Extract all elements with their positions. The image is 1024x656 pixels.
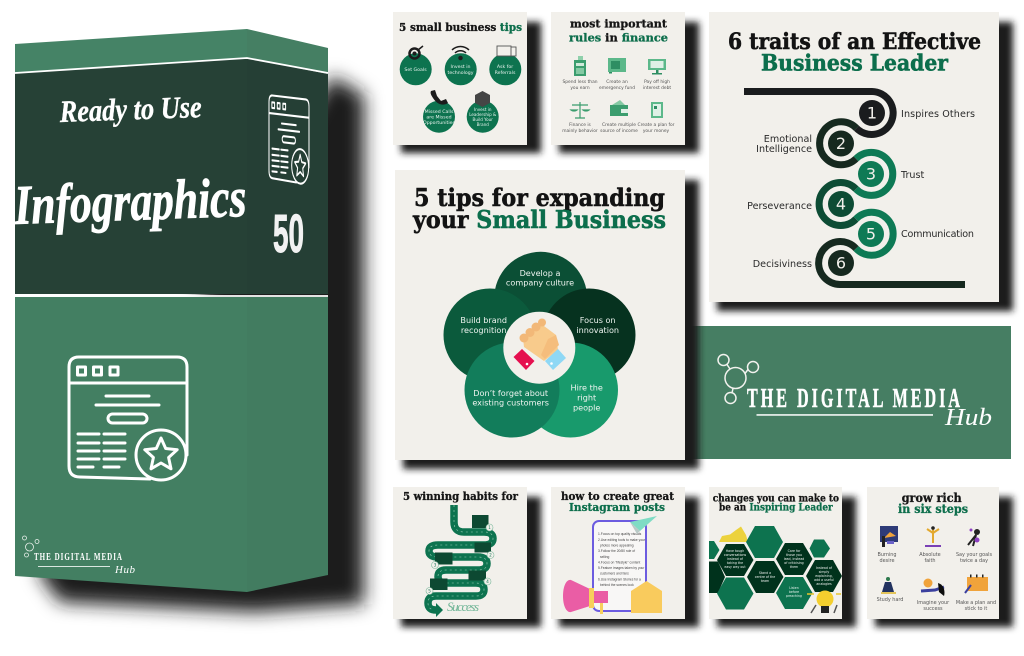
tip line 6: 4.Focus on "lifestyle" content [598, 560, 640, 564]
banner logo mark [718, 354, 758, 404]
caption: behavior: Finance is [569, 123, 591, 128]
icon: target [410, 46, 423, 58]
step 1 [859, 100, 885, 126]
tip: leadership: Leadership & [469, 112, 497, 117]
logo script: Hub [114, 564, 136, 576]
card background [393, 487, 527, 619]
tip: technology: technology [447, 70, 474, 76]
heading line 2: be an Inspiring Leader [719, 503, 833, 514]
box top band side [247, 29, 328, 74]
petal text: brand recognition: Build brand [460, 315, 507, 325]
tip: leadership: Build Your [473, 117, 493, 122]
hexagon text: care for those: of criticising [784, 561, 804, 565]
tip: set goals: Set Goals [404, 67, 427, 73]
step 5 [858, 221, 884, 247]
icon: wifi [452, 46, 469, 60]
hexagon text: useful analogies: Instead of [816, 566, 832, 570]
box logo [22, 536, 136, 576]
card background [393, 12, 527, 145]
heading line 2: rules in finance [569, 31, 668, 45]
card background [551, 487, 685, 619]
tip: referrals: Referrals [495, 70, 516, 76]
box dark panel side [247, 58, 328, 294]
icon: study hard [881, 577, 896, 594]
caption: interest debt: Pay off high [644, 80, 670, 85]
number 5: 5 [428, 588, 431, 594]
trait: Emotional Intelligence: Intelligence [756, 144, 812, 155]
hexagon text: useful analogies: add a useful [814, 578, 834, 582]
step 2: 2 [836, 134, 846, 153]
hexagon text: centre of team: team [761, 579, 769, 583]
phone frame [593, 521, 646, 611]
heading line 1: 5 tips for expanding [414, 183, 665, 212]
habit numbers [426, 524, 494, 594]
icon: imagine success [921, 578, 944, 596]
card background [395, 170, 685, 460]
heading: most important [570, 17, 668, 31]
icon: monitor [648, 59, 666, 74]
icon: chat bubbles [497, 46, 516, 56]
tip line 2: 2.Use editing tools to make your [598, 538, 646, 542]
card background [709, 12, 999, 302]
panel: 6 traits of an effective business leader [709, 12, 999, 302]
panel: 5 tips for expanding your small business [395, 170, 685, 460]
hexagon text: care for those: those you [786, 553, 802, 557]
petal text: right people: right [577, 393, 596, 403]
hexagon text: care for those: Care for [788, 549, 800, 553]
caption: imagine success: success [923, 606, 943, 612]
box dark panel front [15, 58, 247, 294]
trait: Inspires Others: Inspires Others [901, 109, 975, 120]
caption: say your goals: Say your goals [956, 552, 992, 558]
hexagon text: tough conversations: taking the [727, 561, 743, 565]
panel: 5 winning habits [393, 487, 527, 619]
box text: 50: 50 [273, 204, 304, 264]
logo wordmark: THE DIGITAL MEDIA [34, 552, 123, 563]
heading: 5 winning habits for [403, 490, 518, 503]
icon: lightbulb [807, 590, 841, 613]
logo mark [22, 536, 39, 557]
venn petals [444, 252, 636, 438]
tip: missed calls: Missed Calls [425, 110, 453, 115]
step 6: 6 [836, 254, 846, 272]
hexagon text: tough conversations: instead of [727, 557, 744, 561]
tip line 4: 3.Follow the 20/80 rule of [598, 549, 635, 553]
caption: behavior: mainly behavior [562, 128, 598, 134]
caption: plan: Create a plan for [638, 123, 674, 128]
hexagon text: listen before preaching: Listen [789, 586, 799, 590]
tip: missed calls: Opportunities [423, 120, 456, 126]
trait: Trust: Trust [900, 170, 924, 181]
icon: say your goals [968, 528, 980, 546]
caption: study hard: Study hard [877, 597, 903, 603]
icon: handshake fist [514, 318, 566, 370]
heading line 1: how to create great [561, 490, 675, 503]
number 2: 2 [489, 552, 492, 558]
trait: Decisiviness: Decisiviness [753, 259, 812, 270]
serpentine path [744, 92, 965, 285]
icon: absolute faith [925, 526, 941, 546]
panel: product box [13, 29, 364, 612]
hexagon text: centre of team: Stand a [759, 571, 771, 575]
panel: grow rich in six steps [867, 487, 999, 619]
tip: missed calls: are Missed [426, 114, 452, 120]
heading: 5 small business tips [399, 21, 522, 34]
petal text: brand recognition: recognition [461, 325, 506, 335]
road dashes [428, 505, 493, 610]
road arrow [432, 603, 443, 617]
hexagon text: tough conversations: Have tough [726, 549, 744, 553]
hexagon text: useful analogies: explaining, [815, 574, 833, 578]
phone tips list [598, 532, 646, 587]
step 2 [828, 130, 854, 156]
tip line 3: photos more appealing [600, 544, 634, 548]
heading line 1: changes you can make to [713, 494, 839, 505]
card background [867, 487, 999, 619]
panel: how to create great Instagram posts [551, 487, 685, 619]
tip circles [400, 53, 521, 133]
tip: leadership: Invest in [474, 107, 491, 112]
hexagon text: useful analogies: analogies [816, 582, 832, 586]
winding road [428, 505, 493, 610]
logo underline [38, 565, 110, 568]
panel: most important rules in finance [551, 12, 685, 145]
trait: Perseverance: Perseverance [747, 201, 812, 212]
heading line 1: 6 traits of an Effective [728, 29, 981, 55]
caption: absolute faith: Absolute [919, 552, 941, 558]
icon: paper plane [630, 516, 657, 534]
caption: imagine success: Imagine your [917, 600, 949, 606]
habit labels [430, 515, 491, 590]
banner script: Hub [944, 405, 992, 431]
box top band front [15, 29, 247, 73]
tip line 5: selling [600, 555, 610, 559]
banner underline [756, 414, 933, 416]
box text: Infographics: Infographics [13, 167, 247, 237]
caption: emergency fund: emergency fund [599, 85, 635, 91]
step 5: 5 [866, 224, 876, 244]
caption: income: source of income [600, 128, 638, 134]
finance captions [562, 79, 675, 134]
petal text: existing customers: Don’t forget about [473, 388, 548, 398]
icon: yellow house shape [631, 581, 662, 613]
tip: leadership: Brand [477, 122, 489, 127]
script word: Success: Success [447, 599, 479, 614]
caption: spend less: you earn [570, 85, 590, 91]
card background [551, 12, 685, 145]
panel: changes to be an inspiring leader [709, 487, 842, 619]
caption: burning desire: Burning [877, 552, 897, 558]
caption: say your goals: twice a day [960, 558, 988, 564]
box shadow [38, 76, 364, 612]
icon: burning desire [880, 526, 898, 547]
hexagon text: listen before preaching: preaching [786, 594, 802, 598]
hexagon grid [709, 526, 842, 610]
card shadows [401, 22, 1013, 627]
tip: technology: Invest in [450, 65, 471, 70]
step 3: 3 [866, 164, 876, 184]
numbered step circles [828, 100, 885, 276]
step 1: 1 [867, 104, 877, 122]
heading line 2: Instagram posts [569, 501, 665, 514]
tip line 9: 6.Use Instagram Stories for a [598, 578, 641, 582]
hexagon text: centre of team: centre of the [755, 575, 775, 579]
caption: absolute faith: faith [924, 558, 936, 564]
hexagon text: tough conversations: easy way out [724, 565, 746, 569]
petal text: right people: people [573, 403, 600, 413]
caption: make a plan: stick to it [965, 606, 987, 612]
panel: brand banner [686, 326, 1011, 459]
icon: hexagon badge [475, 91, 490, 107]
tip line 1: 1.Focus on top quality visuals [598, 532, 642, 536]
icon: browser with star, side [269, 95, 309, 185]
number 3: 3 [434, 562, 437, 568]
petal text: innovation: Focus on [580, 315, 616, 325]
icon: calculator [574, 56, 586, 76]
heading line 1: grow rich [902, 491, 962, 505]
caption: burning desire: desire [880, 558, 894, 564]
step 4: 4 [836, 194, 846, 214]
step 3 [858, 161, 884, 187]
panel: 5 small business tips [393, 12, 527, 145]
step captions [877, 552, 996, 612]
number 1: 1 [488, 525, 491, 530]
number 4: 4 [486, 579, 489, 584]
caption: make a plan: Make a plan and [956, 600, 996, 606]
box lower panel side [247, 297, 328, 592]
tip: referrals: Ask for [497, 65, 513, 70]
hexagon text: care for those: lead, instead [784, 557, 804, 561]
caption: emergency fund: Create an [606, 80, 628, 85]
card background [709, 487, 842, 619]
icon: phone [431, 90, 448, 105]
hexagon text: tough conversations: conversations [724, 553, 746, 557]
tip line 8: customers and fans [600, 572, 629, 576]
heading line 2: in six steps [898, 502, 968, 516]
box white stripes [15, 58, 328, 296]
trait: Emotional Intelligence: Emotional [764, 134, 812, 145]
hexagon text: listen before preaching: before [789, 590, 799, 594]
petal text: company culture: company culture [506, 278, 574, 288]
caption: income: Create multiple [602, 123, 636, 128]
caption: plan: your money [643, 128, 670, 134]
step 6 [828, 250, 854, 276]
tip line 7: 5.Feature images taken by your [598, 566, 645, 570]
icon: browser with star, front [69, 357, 187, 480]
hexagon text: useful analogies: simply [819, 570, 829, 574]
box text: Ready to Use: Ready to Use [58, 89, 202, 129]
step 4 [828, 191, 854, 217]
tip labels [404, 64, 516, 127]
petal text: innovation: innovation [576, 325, 619, 335]
icon: safe [608, 58, 626, 74]
icon: yellow mountain [719, 526, 748, 542]
hexagon text: care for those: them [790, 565, 798, 569]
petal text: right people: Hire the [571, 383, 603, 393]
banner background [686, 326, 1011, 459]
caption: interest debt: interest debt [643, 85, 671, 91]
heading line 2: your Small Business [412, 205, 666, 234]
box lower panel front [15, 297, 247, 592]
tip line 10: behind the scenes look [600, 583, 634, 587]
icon: notebook [651, 102, 663, 118]
petal text: existing customers: existing customers [472, 398, 549, 408]
heading line 2: Business Leader [761, 51, 948, 77]
icon: megaphone [563, 580, 608, 614]
trait: Communication: Communication [901, 229, 974, 240]
icon: scales [571, 102, 589, 118]
petal text: company culture: Develop a [520, 268, 560, 278]
caption: spend less: Spend less than [562, 80, 598, 85]
icon: wallet [610, 100, 628, 116]
icon: plan calendar [965, 574, 988, 593]
finance icons [571, 56, 666, 118]
